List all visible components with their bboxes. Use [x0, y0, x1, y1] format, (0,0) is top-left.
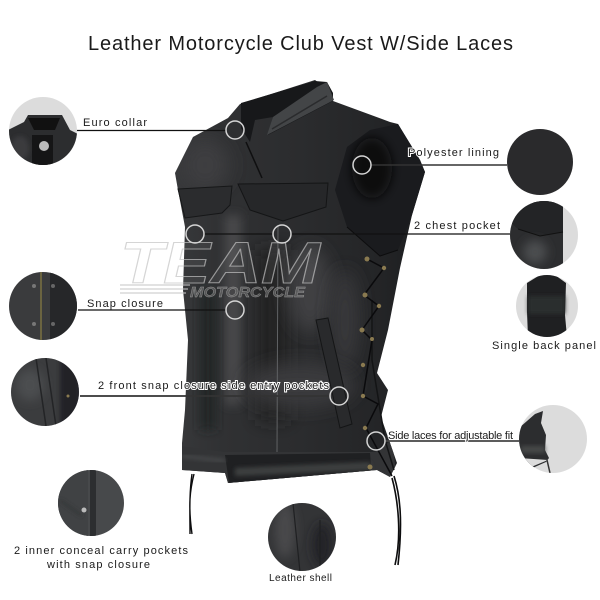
label: polyester lining: Polyester lining	[408, 147, 499, 159]
detail: snap closure	[8, 271, 78, 341]
detail: front pocket	[10, 357, 80, 427]
detail: side laces	[519, 404, 587, 474]
hotspot rings	[186, 121, 385, 450]
detail: chest pocket	[510, 201, 578, 270]
detail: leather shell	[267, 502, 337, 573]
zip placket	[277, 225, 278, 452]
label: euro collar: Euro collar	[83, 117, 147, 129]
hanging lace right	[392, 476, 401, 565]
vest body	[170, 78, 430, 488]
detail: euro collar	[8, 97, 80, 167]
label: leather shell: Leather shell	[269, 573, 332, 584]
watermark logo: TEAM	[120, 231, 322, 296]
label: snap closure: Snap closure	[87, 298, 163, 310]
watermark logo: MOTORCYCLE	[190, 284, 306, 301]
hanging lace left	[190, 474, 194, 534]
label: side laces: Side laces for adjustable fit	[388, 430, 513, 442]
leather vest illustration	[170, 78, 430, 565]
labels	[14, 117, 596, 584]
collar	[241, 81, 333, 142]
title: Leather Motorcycle Club Vest W/Side Laces	[88, 33, 513, 55]
armhole lining	[335, 124, 425, 255]
detail: inner carry pocket	[58, 470, 124, 536]
label: chest pocket: 2 chest pocket	[414, 220, 500, 232]
eyelets and laces	[360, 256, 392, 476]
side entry pocket	[316, 318, 352, 428]
vest hem band	[182, 442, 396, 483]
label: inner pockets	[14, 545, 188, 571]
label: back panel: Single back panel	[492, 340, 596, 352]
side edge line	[372, 300, 394, 470]
detail: polyester lining	[507, 129, 573, 195]
leader lines	[77, 130, 519, 441]
left chest pocket flap	[178, 186, 232, 218]
label: inner pockets: with snap closure	[46, 559, 150, 571]
label: front pockets: 2 front snap closure side entry pockets	[98, 380, 330, 392]
detail: back panel	[516, 275, 578, 337]
right chest pocket flap	[238, 183, 328, 221]
label: inner pockets: 2 inner conceal carry pockets	[14, 545, 188, 557]
